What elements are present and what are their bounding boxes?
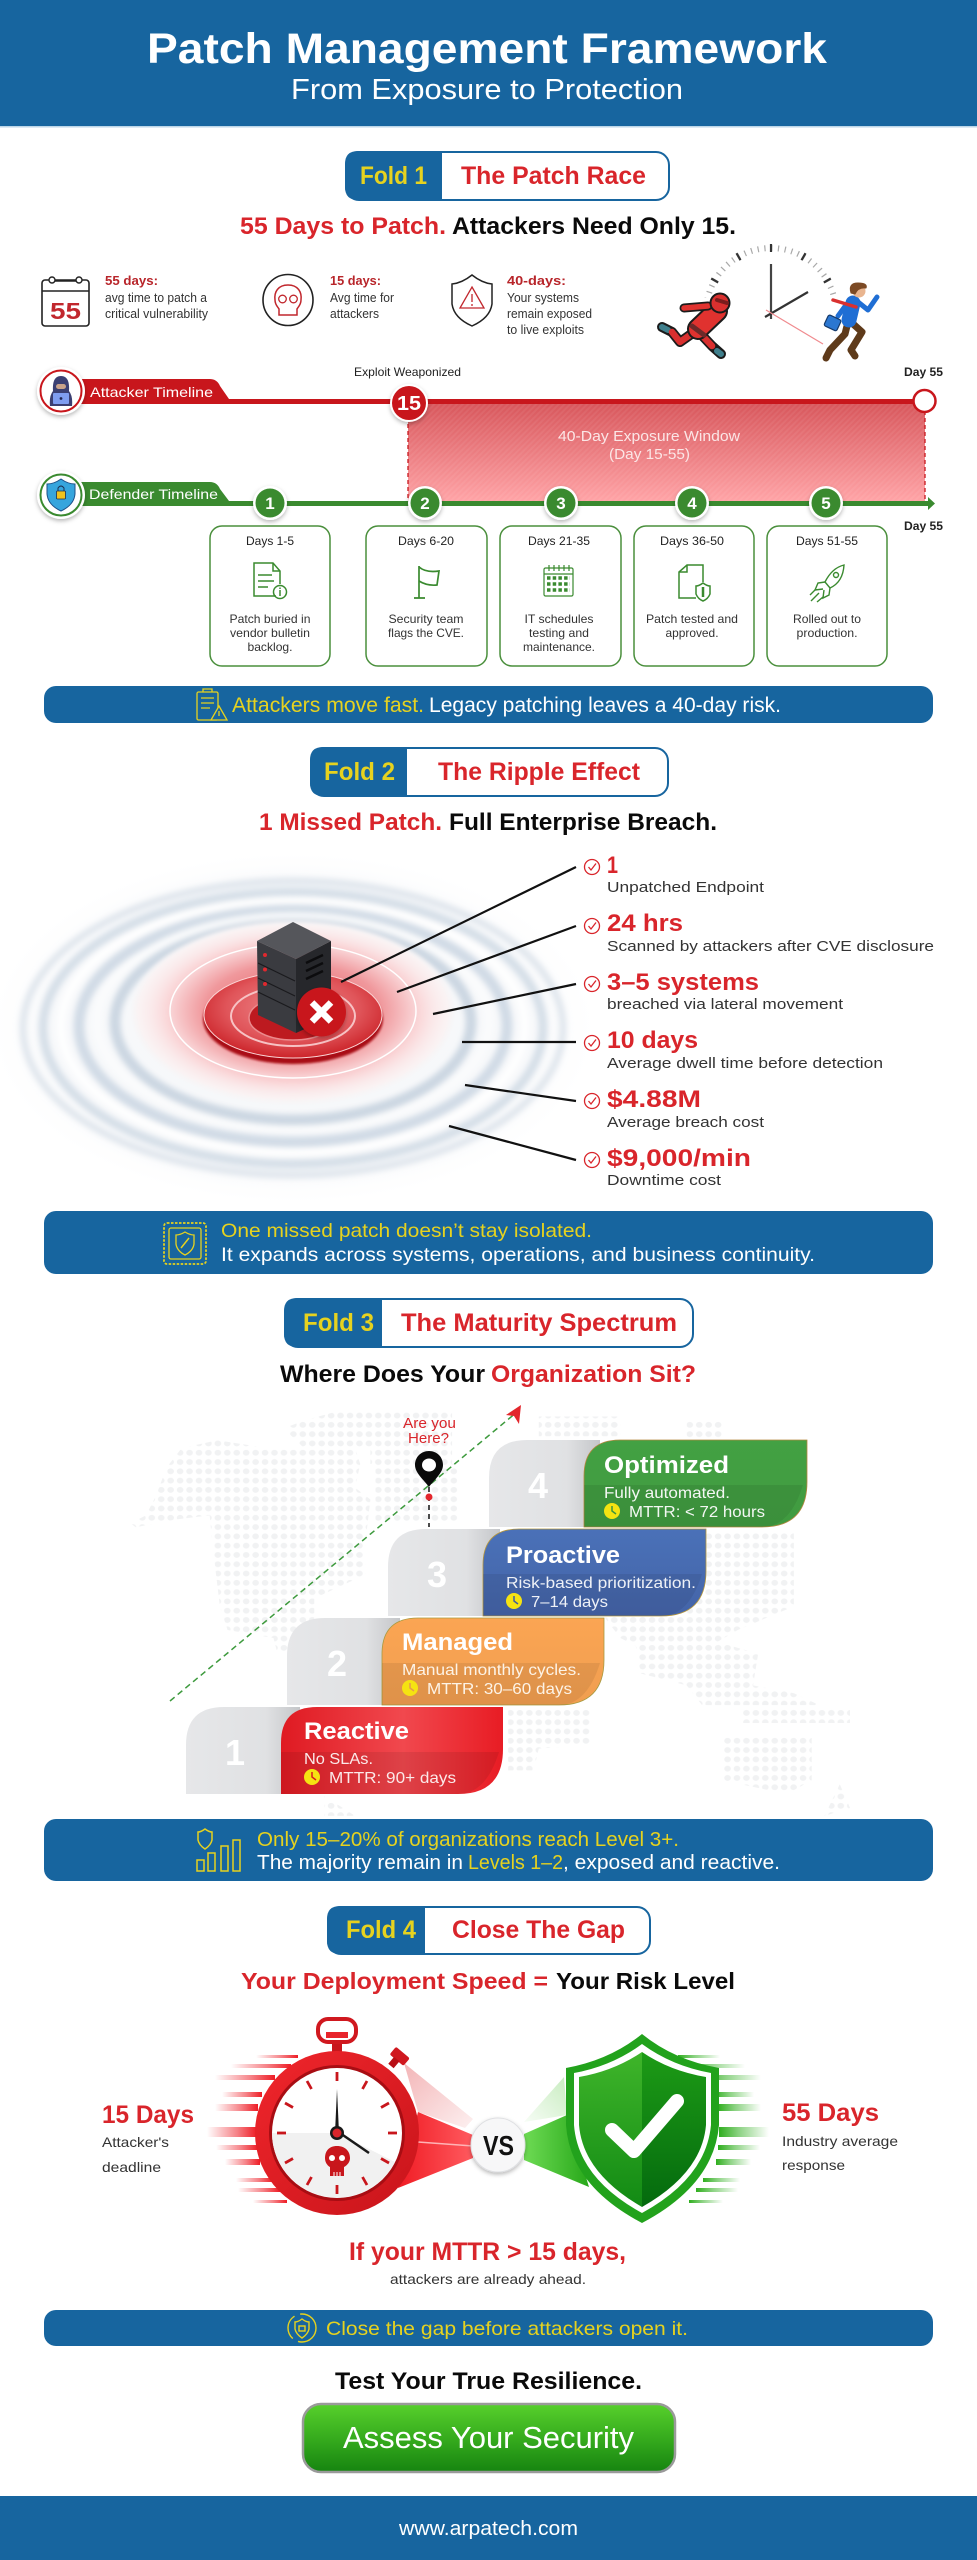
card: days 21-35: maintenance. bbox=[523, 640, 595, 654]
icon: document info bbox=[254, 563, 286, 598]
card: days 1-5: vendor bulletin bbox=[230, 626, 310, 640]
day 55 marker bbox=[914, 390, 936, 412]
icon: red x badge bbox=[297, 988, 346, 1036]
icon: document shield bbox=[679, 565, 710, 601]
fold 1 heading pill: Fold 1 bbox=[360, 162, 427, 190]
industry response text: response bbox=[782, 2157, 845, 2173]
timeline: defender track: Day 55 bbox=[904, 519, 943, 533]
you are here pin: Here? bbox=[408, 1431, 449, 1447]
level 1 reactive bbox=[186, 1707, 503, 1794]
stat: 40 days: remain exposed bbox=[507, 307, 592, 321]
stat: 55 days: avg time to patch a bbox=[105, 291, 207, 305]
step marker 2 bbox=[408, 486, 442, 520]
industry response text: 55 Days bbox=[782, 2099, 879, 2127]
icon: schedule calendar bbox=[544, 565, 573, 596]
level 3 proactive: Proactive bbox=[506, 1542, 620, 1569]
fold 4 heading pill bbox=[327, 1906, 650, 1954]
connector lines bbox=[341, 867, 576, 1160]
stat: 55 days bbox=[42, 273, 209, 326]
panel: fold 4 close the gap bbox=[44, 1906, 933, 2472]
industry response text bbox=[782, 2099, 898, 2173]
icon: gold security badge bbox=[288, 2314, 316, 2342]
panel: fold 2 the ripple effect bbox=[0, 747, 934, 1274]
step marker 1: 1 bbox=[265, 494, 275, 513]
day 15 marker: 15 bbox=[397, 393, 421, 415]
stat: breach cost: $4.88M bbox=[607, 1086, 701, 1113]
stat: 15 days: Avg time for bbox=[330, 291, 394, 305]
growth arrow bbox=[170, 1405, 521, 1701]
timeline: attacker track: Day 55 bbox=[904, 365, 943, 379]
card: days 36-50 bbox=[634, 526, 754, 666]
you are here pin: Are you bbox=[403, 1416, 456, 1432]
card: days 51-55: Rolled out to bbox=[793, 612, 861, 626]
attacker deadline text: 15 Days bbox=[102, 2101, 194, 2129]
stat: 10 days: Average dwell time before detection bbox=[607, 1055, 883, 1072]
level 1 reactive: MTTR: 90+ days bbox=[329, 1770, 456, 1787]
level 3 proactive: 7–14 days bbox=[531, 1594, 608, 1611]
vs badge bbox=[471, 2118, 525, 2172]
fold 1 heading pill: The Patch Race bbox=[461, 162, 646, 190]
attacker deadline text bbox=[102, 2101, 194, 2175]
fold 1 headline: Attackers Need Only 15. bbox=[452, 213, 736, 240]
stat: 55 days: 55 days: bbox=[105, 273, 158, 288]
fold 4 heading pill: Close The Gap bbox=[452, 1916, 625, 1944]
card: days 36-50: approved. bbox=[666, 626, 718, 640]
icon: shield badge bbox=[164, 1223, 206, 1264]
callout: level 3 statistic: The majority remain in bbox=[257, 1852, 463, 1874]
timeline: attacker track bbox=[37, 365, 943, 422]
attacker runner bbox=[662, 294, 730, 354]
level 1 reactive: 1 bbox=[225, 1732, 245, 1773]
fold 3 heading pill: Fold 3 bbox=[303, 1309, 374, 1337]
page header band bbox=[0, 0, 977, 128]
timeline: exposure window bbox=[408, 404, 925, 501]
fold 3 heading pill bbox=[284, 1298, 693, 1347]
step marker 3 bbox=[544, 486, 578, 520]
card: days 6-20: flags the CVE. bbox=[388, 626, 464, 640]
level 2 managed: 2 bbox=[327, 1643, 347, 1684]
icon: defender badge bbox=[37, 471, 85, 519]
level 2 managed: Manual monthly cycles. bbox=[402, 1662, 581, 1679]
card: days 51-55: production. bbox=[796, 626, 858, 640]
callout: level 3 statistic: , exposed and reactive. bbox=[563, 1852, 780, 1874]
stat: unpatched endpoint: Unpatched Endpoint bbox=[607, 879, 765, 896]
attacker deadline text: Attacker's bbox=[102, 2134, 169, 2150]
stat: 10 days bbox=[584, 1027, 883, 1072]
card: days 21-35: Days 21-35 bbox=[528, 534, 590, 548]
callout: level 3 statistic bbox=[44, 1819, 933, 1881]
clock bbox=[704, 244, 836, 344]
timeline: attacker track: Exploit Weaponized bbox=[354, 365, 461, 379]
step marker 2: 2 bbox=[420, 494, 430, 513]
fold 3 headline: Where Does Your bbox=[280, 1361, 485, 1388]
title: Patch Management Framework bbox=[147, 25, 827, 73]
fold 2 heading pill: The Ripple Effect bbox=[438, 758, 641, 786]
fold 2 heading pill bbox=[310, 747, 668, 796]
panel: fold 3 the maturity spectrum bbox=[44, 1298, 933, 1881]
level 2 managed: MTTR: 30–60 days bbox=[427, 1681, 572, 1698]
timeline: exposure window: (Day 15-55) bbox=[609, 446, 690, 463]
vs badge: VS bbox=[483, 2130, 514, 2161]
stat: 3-5 systems: 3–5 systems bbox=[607, 969, 759, 996]
callout: level 3 statistic: Only 15–20% of organizations reach Level 3+. bbox=[257, 1829, 679, 1851]
fold 4 headline: Your Risk Level bbox=[556, 1968, 735, 1994]
card: days 21-35: testing and bbox=[529, 626, 589, 640]
step marker 5: 5 bbox=[821, 494, 831, 513]
card: days 6-20 bbox=[366, 526, 487, 666]
stat: 55 days: critical vulnerability bbox=[105, 307, 209, 321]
level 4 optimized: Fully automated. bbox=[604, 1485, 730, 1502]
stat: unpatched endpoint: 1 bbox=[607, 852, 618, 879]
level 2 managed bbox=[287, 1618, 604, 1705]
fold 3 headline: Organization Sit? bbox=[491, 1361, 696, 1388]
stat: downtime cost bbox=[584, 1145, 751, 1189]
step marker 1 bbox=[253, 486, 287, 520]
icon: stopwatch bbox=[255, 2019, 419, 2215]
level 4 optimized: 4 bbox=[528, 1465, 548, 1506]
card: days 36-50: Patch tested and bbox=[646, 612, 738, 626]
industry response text: Industry average bbox=[782, 2133, 898, 2149]
icon: green shield with check bbox=[566, 2034, 719, 2223]
green speed cone bbox=[524, 2077, 589, 2187]
card: days 21-35 bbox=[500, 526, 621, 666]
speed lines: green bbox=[678, 2055, 769, 2203]
red speed cone bbox=[398, 2063, 473, 2188]
stat: 10 days: 10 days bbox=[607, 1027, 698, 1054]
level 3 proactive bbox=[388, 1529, 706, 1616]
footer: www.arpatech.com bbox=[398, 2518, 578, 2540]
icon: skull circle bbox=[263, 274, 313, 326]
mttr warning: attackers are already ahead. bbox=[390, 2271, 586, 2287]
level 2 managed: Managed bbox=[402, 1629, 513, 1656]
callout: missed patch spreads bbox=[44, 1211, 933, 1274]
stat: 40 days: 40-days: bbox=[507, 273, 566, 288]
card: days 51-55 bbox=[767, 526, 887, 666]
fold 4 headline bbox=[241, 1968, 735, 1994]
stat: 15 days bbox=[263, 273, 394, 326]
stat: 24 hrs: 24 hrs bbox=[607, 910, 683, 937]
ripple illustration bbox=[0, 848, 603, 1208]
timeline: exposure window: 40-Day Exposure Window bbox=[558, 428, 740, 445]
fold 2 heading pill: Fold 2 bbox=[324, 758, 395, 786]
dotted world map bbox=[131, 1411, 850, 1816]
level 4 optimized: MTTR: < 72 hours bbox=[629, 1504, 765, 1521]
speed lines: red bbox=[207, 2055, 298, 2203]
timeline: defender track bbox=[37, 471, 943, 533]
card: days 21-35: IT schedules bbox=[524, 612, 594, 626]
icon: flag bbox=[414, 566, 439, 598]
stat: 40 days: to live exploits bbox=[507, 323, 584, 337]
stat: 15 days: 15 days: bbox=[330, 273, 381, 288]
step marker 5 bbox=[809, 486, 843, 520]
callout: missed patch spreads: It expands across systems, operations, and business continuity. bbox=[221, 1244, 815, 1266]
subtitle: From Exposure to Protection bbox=[291, 74, 683, 106]
callout: level 3 statistic: Levels 1–2 bbox=[468, 1852, 563, 1874]
attacker deadline text: deadline bbox=[102, 2159, 161, 2175]
stat: 24 hrs bbox=[584, 910, 934, 955]
stat: 3-5 systems: breached via lateral movement bbox=[607, 996, 844, 1013]
icon: skull bbox=[325, 2146, 350, 2176]
level 3 proactive: Risk-based prioritization. bbox=[506, 1575, 696, 1592]
callout: 40-day risk: Legacy patching leaves a 40-day risk. bbox=[429, 694, 781, 717]
step marker 4: 4 bbox=[687, 494, 697, 513]
card: days 6-20: Security team bbox=[388, 612, 464, 626]
stat: 15 days: attackers bbox=[330, 307, 379, 321]
icon: server bbox=[257, 922, 331, 1033]
fold 1 heading pill bbox=[345, 151, 669, 200]
footer bbox=[0, 2496, 977, 2560]
day 15 marker bbox=[390, 384, 428, 422]
cta button: Assess Your Security bbox=[343, 2420, 634, 2455]
card: days 6-20: Days 6-20 bbox=[398, 534, 454, 548]
fold 2 headline bbox=[259, 809, 717, 836]
fold 1 headline bbox=[240, 213, 736, 240]
stat: downtime cost: $9,000/min bbox=[607, 1145, 751, 1172]
timeline: attacker track: Attacker Timeline bbox=[90, 384, 213, 400]
step marker 3: 3 bbox=[556, 494, 566, 513]
panel: fold 1 the patch race bbox=[37, 151, 943, 723]
icon: shield and bars bbox=[197, 1829, 240, 1871]
level 1 reactive: No SLAs. bbox=[304, 1751, 373, 1768]
level 4 optimized bbox=[489, 1440, 807, 1527]
callout: missed patch spreads: One missed patch doesn’t stay isolated. bbox=[221, 1220, 592, 1242]
icon: calendar: 55 bbox=[50, 298, 81, 324]
stat: downtime cost: Downtime cost bbox=[607, 1172, 722, 1189]
closing prompt: Test Your True Resilience. bbox=[335, 2368, 642, 2395]
card: days 1-5: backlog. bbox=[248, 640, 292, 654]
stat: 24 hrs: Scanned by attackers after CVE disclosure bbox=[607, 938, 934, 955]
mttr warning: If your MTTR > 15 days, bbox=[349, 2238, 626, 2266]
stat: breach cost bbox=[584, 1086, 765, 1131]
card: days 1-5: Patch buried in bbox=[230, 612, 310, 626]
fold 2 headline: 1 Missed Patch. bbox=[259, 809, 442, 836]
card: days 51-55: Days 51-55 bbox=[796, 534, 858, 548]
stat: 3-5 systems bbox=[584, 969, 844, 1013]
stat: 40 days: Your systems bbox=[507, 291, 579, 305]
card: days 1-5 bbox=[210, 526, 330, 666]
step marker 4 bbox=[675, 486, 709, 520]
cta button bbox=[303, 2404, 675, 2472]
icon: attacker badge bbox=[37, 367, 85, 415]
defender runner bbox=[824, 283, 877, 358]
level 3 proactive: 3 bbox=[427, 1554, 447, 1595]
callout: 40-day risk: Attackers move fast. bbox=[232, 694, 424, 717]
fold 3 headline bbox=[280, 1361, 696, 1388]
icon: rocket bbox=[810, 565, 844, 602]
callout: 40-day risk bbox=[44, 686, 933, 723]
stat: breach cost: Average breach cost bbox=[607, 1114, 765, 1131]
level 4 optimized: Optimized bbox=[604, 1452, 729, 1479]
card: days 1-5: Days 1-5 bbox=[246, 534, 294, 548]
card: days 36-50: Days 36-50 bbox=[660, 534, 724, 548]
icon: calendar bbox=[42, 277, 89, 326]
stat: 40 days bbox=[452, 273, 592, 337]
fold 4 headline: Your Deployment Speed = bbox=[241, 1968, 548, 1994]
you are here pin bbox=[403, 1416, 456, 1527]
timeline: defender track: Defender Timeline bbox=[89, 486, 218, 502]
fold 4 heading pill: Fold 4 bbox=[346, 1916, 416, 1944]
mttr warning bbox=[349, 2238, 626, 2287]
callout: close the gap bbox=[44, 2310, 933, 2346]
fold 2 headline: Full Enterprise Breach. bbox=[449, 809, 717, 836]
callout: close the gap: Close the gap before attackers open it. bbox=[326, 2318, 688, 2340]
fold 3 heading pill: The Maturity Spectrum bbox=[401, 1309, 677, 1337]
icon: warning shield bbox=[452, 275, 492, 326]
icon: clock with racing figures bbox=[662, 244, 877, 378]
fold 1 headline: 55 Days to Patch. bbox=[240, 213, 446, 240]
icon: checklist warning bbox=[197, 689, 227, 720]
stat: unpatched endpoint bbox=[584, 852, 765, 896]
level 1 reactive: Reactive bbox=[304, 1718, 409, 1745]
